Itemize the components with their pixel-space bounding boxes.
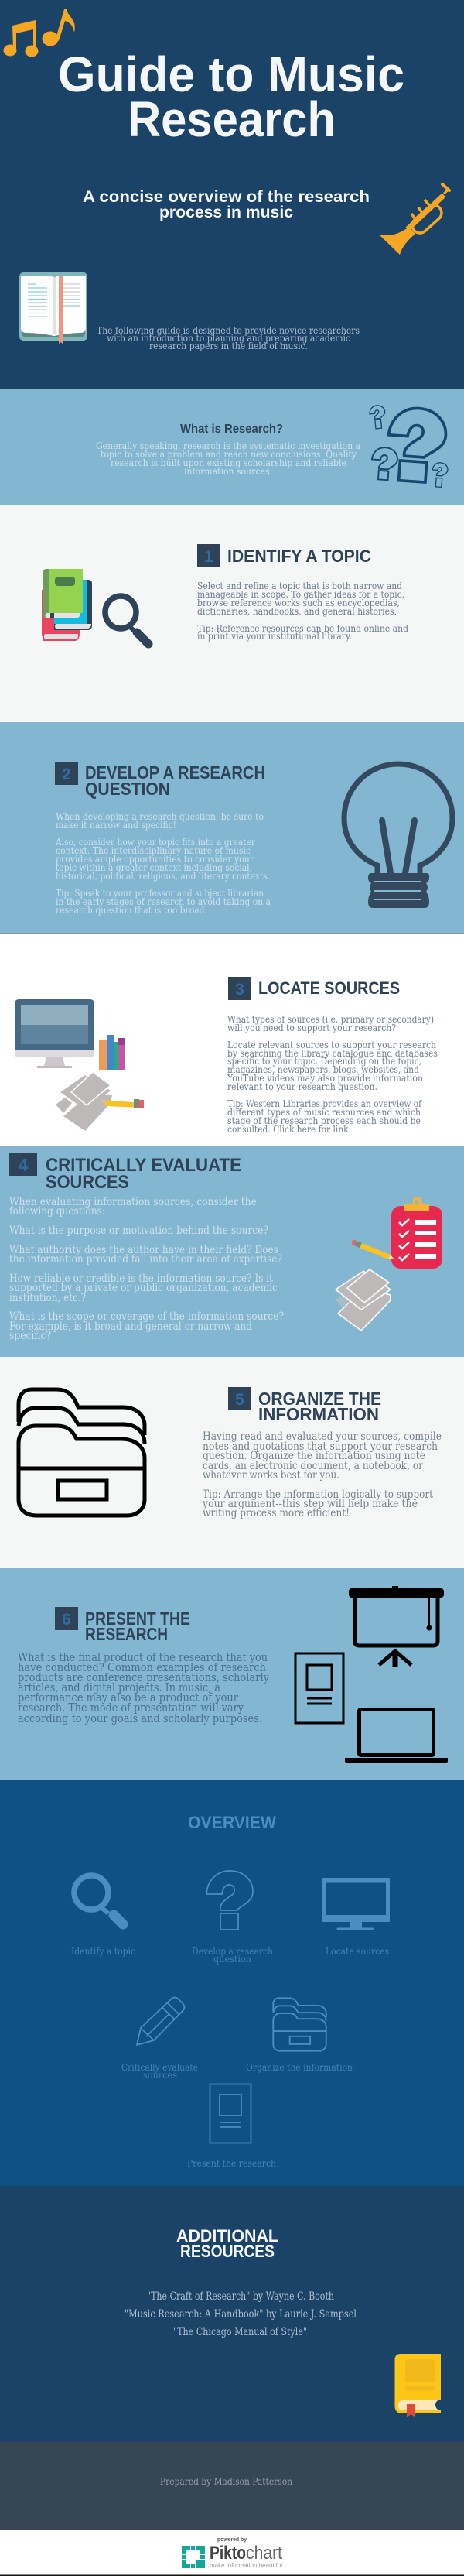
body text <box>18 1652 270 1725</box>
icon: desktop monitor <box>15 999 94 1068</box>
body text: research. The mode of presentation will vary <box>18 1702 244 1714</box>
definition text <box>96 440 360 477</box>
number badge 5 <box>228 1387 251 1410</box>
icon: piktochart logo <box>182 2546 205 2568</box>
body text: Also, consider how your topic fits into a greater <box>55 836 255 848</box>
icon: pencil <box>352 1239 394 1259</box>
label row 1 <box>71 1945 389 1965</box>
body text: have conducted? Common examples of research <box>18 1662 266 1674</box>
icon: music notes <box>3 9 75 57</box>
heading: develop a research question: QUESTION <box>85 779 170 799</box>
icon: magnifier <box>74 1875 123 1924</box>
body text: How reliable or credible is the information source? Is it <box>9 1273 274 1285</box>
panel: header <box>0 0 464 389</box>
heading: additional resources: RESOURCES <box>180 2242 275 2261</box>
body text: Tip: Reference resources can be found online and <box>197 622 408 634</box>
body text: specific? <box>9 1330 51 1342</box>
definition text: Generally speaking, research is the systematic investigation a <box>96 440 360 451</box>
body text: notes and quotations that support your research <box>203 1440 438 1453</box>
definition text: research is built upon existing scholarship and reliable <box>111 457 346 468</box>
body text: browse reference works such as encyclopedias, <box>197 597 400 608</box>
body text: following questions: <box>9 1205 105 1218</box>
heading: present the research <box>85 1608 190 1644</box>
body text: For example, is it broad and general or narrow and <box>9 1321 252 1333</box>
label row 2 <box>121 2061 353 2081</box>
credit text: Prepared by Madison Patterson <box>160 2475 292 2487</box>
body text: Select and refine a topic that is both narrow and <box>197 580 402 591</box>
definition text: topic to solve a problem and reach new conclusions. Quality <box>101 448 357 460</box>
body text: manageable in scope. To gather ideas for a topic, <box>197 588 404 600</box>
body text: writing process more efficient! <box>203 1507 350 1519</box>
resource list: "The Craft of Research" by Wayne C. Booth <box>147 2290 334 2303</box>
heading: critically evaluate sources: SOURCES <box>46 1172 129 1193</box>
icon: clipboard checklist <box>391 1197 442 1269</box>
number badge 6 <box>55 1607 78 1630</box>
body text: supported by a private or public organization, academic <box>9 1282 278 1294</box>
icon: papers and pencil <box>56 1072 144 1131</box>
body text: the information provided fall into their area of expertise? <box>9 1253 282 1266</box>
icon: poster <box>295 1653 343 1723</box>
icon: trumpet <box>379 184 449 255</box>
subtitle: process in music <box>159 204 293 221</box>
title <box>58 46 404 147</box>
label row 2: sources <box>143 2069 177 2081</box>
body text: research question that is too broad. <box>56 904 207 916</box>
label row 1: Identify a topic <box>71 1945 135 1957</box>
label row 2: Critically evaluate <box>121 2061 198 2073</box>
body text: Tip: Western Libraries provides an overview of <box>227 1098 422 1109</box>
icon: papers <box>336 1269 391 1331</box>
body text: will you need to support your research? <box>227 1022 396 1033</box>
panel: what is research <box>0 389 464 505</box>
body text: cards, an electronic document, a notebook, or <box>203 1460 423 1472</box>
heading: present the research: RESEARCH <box>85 1624 168 1644</box>
body text: What authority does the author have in their field? Does <box>9 1244 278 1256</box>
heading: critically evaluate sources: CRITICALLY EVALUATE <box>46 1155 241 1176</box>
heading: additional resources <box>176 2226 278 2261</box>
body text: question. Organize the information using note <box>203 1450 425 1462</box>
intro text: with an introduction to planning and preparing academic <box>107 332 350 344</box>
intro text: The following guide is designed to provide novice researchers <box>97 324 360 336</box>
body text: magazines, newspapers, blogs, websites, and <box>227 1064 419 1075</box>
icon: poster outline <box>210 2084 251 2143</box>
body text: When developing a research question, be sure to <box>56 810 264 822</box>
body text: What is the purpose or motivation behind the source? <box>9 1225 268 1237</box>
panel: overview <box>0 1780 464 2186</box>
panel: step 4 critically evaluate sources <box>0 1146 464 1357</box>
number badge 4: 4 <box>19 1155 29 1175</box>
body text: your argument--this step will help make the <box>202 1498 418 1510</box>
powered by label: powered by <box>217 2537 247 2543</box>
body text <box>9 1196 284 1342</box>
definition text: information sources. <box>184 465 272 477</box>
intro text <box>97 324 360 351</box>
number badge 1: 1 <box>204 548 213 566</box>
resource list <box>125 2290 357 2338</box>
number badge 3 <box>228 977 251 1000</box>
icon: question mark <box>206 1871 253 1930</box>
panel: credit footer <box>0 2442 464 2530</box>
icon: projector screen <box>349 1586 444 1667</box>
body text <box>202 1430 442 1519</box>
body text: relevant to your research question. <box>227 1081 377 1092</box>
icon: pencil outline <box>137 1997 184 2045</box>
heading: what is research: What is Research? <box>180 423 283 436</box>
heading: develop a research question: DEVELOP A RESEARCH <box>85 762 265 783</box>
piktochart wordmark: chart <box>246 2543 282 2564</box>
body text: according to your goals and scholarly purposes. <box>18 1713 262 1725</box>
body text: Having read and evaluated your sources, compile <box>203 1430 442 1443</box>
body text: in the early stages of research to avoid taking on a <box>56 896 271 907</box>
icon: laptop <box>345 1709 448 1763</box>
body text: context. The interdisciplinary nature of music <box>56 844 251 856</box>
piktochart wordmark: make information beautiful <box>210 2562 282 2569</box>
heading: overview: OVERVIEW <box>188 1813 276 1832</box>
icon: stacked books <box>42 569 92 641</box>
heading: present the research: PRESENT THE <box>85 1608 190 1629</box>
label: present the research: Present the research <box>187 2157 276 2169</box>
body text <box>227 1013 438 1135</box>
body text: articles, and digital projects. In music, a <box>18 1682 220 1694</box>
panel: step 6 present the research <box>0 1568 464 1780</box>
title: Research <box>128 91 336 147</box>
resource list: "The Chicago Manual of Style" <box>173 2326 307 2338</box>
body text: provides ample opportunities to consider your <box>56 853 254 865</box>
piktochart wordmark: Pikto <box>210 2543 246 2564</box>
icon: monitor <box>322 1878 390 1930</box>
body text: When evaluating information sources, consider the <box>9 1196 257 1208</box>
number badge 6: 6 <box>62 1611 71 1629</box>
body text: whatever works best for you. <box>203 1469 339 1482</box>
number badge 2 <box>55 762 78 785</box>
heading: organize the information <box>258 1389 381 1424</box>
body text: Tip: Arrange the information logically to support <box>203 1488 434 1501</box>
label row 1: Locate sources <box>326 1945 389 1957</box>
piktochart wordmark <box>210 2543 282 2569</box>
body text: by searching the library catalogue and databases <box>227 1047 438 1059</box>
body text: What types of sources (i.e. primary or secondary) <box>227 1013 434 1025</box>
body text: different types of music resources and which <box>227 1106 421 1118</box>
number badge 2: 2 <box>62 766 71 783</box>
body text: YouTube videos may also provide information <box>227 1072 423 1084</box>
body text <box>197 580 408 642</box>
body text: specific to your topic. Depending on the topic, <box>227 1055 421 1067</box>
heading: organize the information: INFORMATION <box>258 1404 379 1424</box>
panel: piktochart branding <box>0 2530 464 2576</box>
body text: consulted. Click here for link. <box>227 1123 351 1135</box>
heading: develop a research question <box>85 762 265 799</box>
panel: additional resources <box>0 2186 464 2442</box>
body text <box>55 810 271 916</box>
label row 1: question <box>213 1953 251 1965</box>
body text: performance may also be a product of your <box>18 1692 238 1704</box>
intro text: research papers in the field of music. <box>149 340 308 351</box>
body text: historical, political, religious, and literary contexts. <box>56 870 270 882</box>
icon: folder outline <box>273 1998 326 2051</box>
body text: What is the final product of the research that you <box>18 1652 268 1664</box>
body text: institution, etc.? <box>9 1292 86 1304</box>
label row 2: Organize the information <box>246 2061 353 2073</box>
heading: critically evaluate sources <box>46 1155 241 1193</box>
panel: step 1 identify a topic <box>0 505 464 722</box>
resource list: "Music Research: A Handbook" by Laurie J. Sampsel <box>125 2308 357 2321</box>
subtitle <box>83 188 370 221</box>
body text: stage of the research process each should be <box>227 1115 421 1126</box>
icon: light bulb <box>344 764 452 908</box>
title: Guide to Music <box>58 46 404 102</box>
body text: products are conference presentations, scholarly <box>18 1672 270 1684</box>
icon: magnifying glass <box>105 596 148 644</box>
heading: organize the information: ORGANIZE THE <box>258 1389 381 1409</box>
heading: additional resources: ADDITIONAL <box>176 2226 278 2245</box>
icon: books on shelf <box>99 1035 125 1070</box>
body text: in print via your institutional library. <box>197 630 352 642</box>
panel: step 2 develop a research question <box>0 722 464 933</box>
icon: yellow book <box>394 2354 446 2417</box>
body text: What is the scope or coverage of the information source? <box>9 1310 284 1323</box>
icon: open book <box>19 272 87 344</box>
body text: dictionaries, handbooks, and general histories. <box>197 605 397 617</box>
number badge 4 <box>9 1153 37 1176</box>
heading: locate sources: LOCATE SOURCES <box>258 978 400 998</box>
body text: Tip: Speak to your professor and subject librarian <box>56 887 264 899</box>
number badge 1 <box>197 544 220 567</box>
icon: question marks <box>369 405 449 488</box>
body text: topic within a greater context including social, <box>56 862 252 873</box>
number badge 5: 5 <box>235 1391 244 1409</box>
body text: Locate relevant sources to support your research <box>227 1039 436 1050</box>
icon: file folders <box>19 1389 145 1516</box>
subtitle: A concise overview of the research <box>83 188 370 206</box>
number badge 3: 3 <box>235 981 244 999</box>
label row 1: Develop a research <box>192 1945 273 1957</box>
heading: identify a topic: IDENTIFY A TOPIC <box>227 546 371 566</box>
panel: step 5 organize the information <box>0 1357 464 1568</box>
body text: make it narrow and specific! <box>56 819 176 831</box>
panel: step 3 locate sources <box>0 934 464 1146</box>
